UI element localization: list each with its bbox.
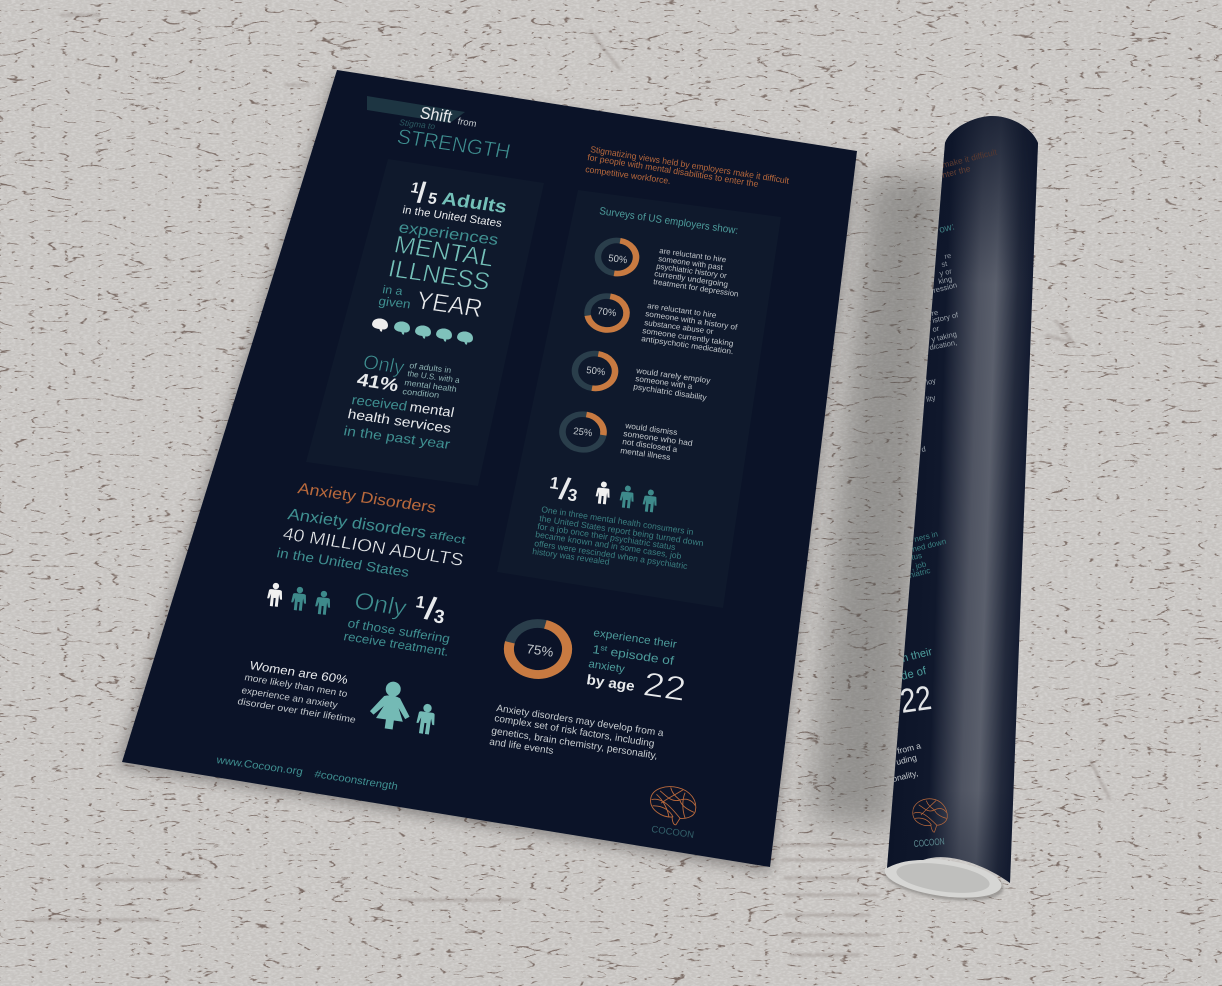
roll visible text: d <box>921 444 926 454</box>
fraction: one fifth: / <box>416 177 427 210</box>
label: 50 percent: 50% <box>608 253 628 266</box>
roll visible text: uding <box>895 752 918 767</box>
panel: one in five adults <box>306 159 544 486</box>
donut: 75 percent <box>502 617 574 681</box>
text: one in three consumers: became known and in some cases, job <box>535 529 682 561</box>
fraction: one fifth: 1 <box>409 179 421 197</box>
roll visible text: or <box>932 324 940 334</box>
fraction: one third <box>548 471 579 507</box>
roll visible text: lity <box>925 393 937 404</box>
text: substance abuse <box>641 301 739 356</box>
text: first episode by age 22 <box>586 627 688 709</box>
heading: adults: Adults <box>440 188 509 217</box>
icon: cocoon brain logo <box>647 784 699 828</box>
label: 75 percent: 75% <box>526 641 555 660</box>
text: mental illness statement: ILLNESS <box>386 255 492 296</box>
text: mental illness statement: in a <box>381 284 404 298</box>
text: only one third receive treatment: of those suffering <box>346 616 452 646</box>
icons: five brains <box>371 317 474 346</box>
roll visible text <box>891 147 998 784</box>
roll visible text: 22 <box>898 679 934 721</box>
roll visible text: dication, <box>929 338 958 352</box>
text: only 41 percent: condition <box>402 387 440 400</box>
donut: 25 percent dismiss <box>559 411 607 453</box>
heading: surveys: Surveys of US employers show: <box>599 205 739 237</box>
donut: 70 percent substance abuse <box>585 293 629 333</box>
text: past history: treatment for depression <box>653 277 739 299</box>
text: only 41 percent: mental health <box>404 378 458 394</box>
text: dismiss: mental illness <box>620 446 671 462</box>
text: dismiss <box>620 421 693 462</box>
text: one in three consumers: for a job once their psychiatric status <box>537 521 676 552</box>
text: first episode by age 22: episode of <box>606 644 675 668</box>
text: past history: someone with past <box>658 254 724 272</box>
roll visible text: ression <box>932 280 958 295</box>
text: one in three consumers <box>532 504 705 571</box>
text: rarely employ: would rarely employ <box>635 366 711 385</box>
text: only one third receive treatment: / <box>422 590 439 627</box>
poster sheet <box>122 70 857 867</box>
roll visible text: from a <box>896 740 922 756</box>
title <box>395 103 513 164</box>
text: past history: psychiatric history or <box>656 262 728 280</box>
text: rarely employ: psychiatric disability <box>633 382 707 402</box>
text: substance abuse: are reluctant to hire <box>647 301 717 320</box>
text: stigmatizing views intro: Stigmatizing views held by employers make it difficult <box>590 144 790 186</box>
text: women are 60 percent <box>237 658 357 725</box>
text: only one third receive treatment: Only <box>352 588 409 622</box>
roll visible text: ners in <box>913 529 939 544</box>
label: 50 percent: 50% <box>586 365 606 378</box>
poster cast shadow <box>118 76 855 872</box>
text: 40 million adults <box>275 506 467 580</box>
text: only 41 percent: in the past year <box>342 423 452 452</box>
fraction: one third: 1 <box>548 473 561 493</box>
title: from <box>456 116 478 130</box>
text: dismiss: not disclosed a <box>622 437 678 454</box>
text: 40 million adults: Anxiety disorders <box>286 506 428 542</box>
roll visible text: ned down <box>911 537 947 554</box>
roll opening <box>882 852 1006 907</box>
roll visible text: ow: <box>938 221 956 236</box>
text: only 41 percent: 41% <box>355 369 401 395</box>
text: stigmatizing views intro: competitive workforce. <box>585 164 671 186</box>
text: substance abuse: substance abuse or <box>644 318 714 336</box>
heading: anxiety disorders: Anxiety Disorders <box>296 480 438 517</box>
text: mental illness statement: given <box>377 294 412 311</box>
text: risk factors: complex set of risk factors, including <box>494 713 655 750</box>
text: only 41 percent <box>342 351 461 452</box>
text: mental illness statement: YEAR <box>414 286 485 323</box>
text: only 41 percent: Only <box>361 351 406 379</box>
text: only one third receive treatment: receive treatment. <box>342 629 450 659</box>
text: only 41 percent: mental <box>408 399 456 420</box>
text: risk factors: Anxiety disorders may develop from a <box>496 703 665 739</box>
icons: three people <box>595 481 658 513</box>
text: substance abuse: someone with a history of <box>645 309 739 332</box>
roll visible text: istory of <box>931 310 960 325</box>
roll cast shadow <box>810 170 950 830</box>
text: risk factors: and life events <box>489 737 554 757</box>
roll visible text: re <box>944 251 952 261</box>
label: 25 percent: 25% <box>573 426 593 439</box>
text: first episode by age 22: 22 <box>641 665 688 709</box>
icons: three people anxiety <box>266 582 332 615</box>
roll visible text: st <box>941 259 949 269</box>
fraction: one third: 3 <box>566 485 579 505</box>
roll visible text: onality, <box>891 768 919 784</box>
text: substance abuse: antipsychotic medication. <box>641 334 734 356</box>
icon: woman and man <box>368 679 437 735</box>
text: substance abuse: someone currently taking <box>642 326 734 348</box>
roll visible text: loy <box>925 376 937 387</box>
text: rarely employ <box>633 366 711 402</box>
text: only one third receive treatment <box>342 588 452 659</box>
title: Stigma to <box>399 117 436 131</box>
text: 40 million adults: affect <box>428 529 467 547</box>
text: one in three consumers: offers were rescinded when a psychiatric <box>534 538 689 571</box>
label: 70 percent: 70% <box>597 306 617 319</box>
text: only one third receive treatment: 1 <box>414 592 427 612</box>
logo wordmark: COCOON <box>651 824 695 841</box>
donut: 50 percent rarely employ <box>572 351 618 391</box>
text: first episode by age 22: st <box>600 643 609 653</box>
roll visible text: make it difficult <box>941 147 998 170</box>
text: one in three consumers: history was revealed <box>532 546 610 567</box>
text: risk factors <box>489 703 665 762</box>
text: only 41 percent: received <box>350 392 408 414</box>
text: mental illness statement <box>377 204 503 323</box>
text: first episode by age 22: anxiety <box>588 658 626 676</box>
roll shading <box>887 116 1038 883</box>
roll visible text: de of <box>900 665 928 683</box>
icon: roll brain logo <box>913 799 947 832</box>
donut: 50 percent reluctant past history <box>595 238 639 276</box>
panel: employer surveys <box>497 190 781 608</box>
roll visible text: nter the <box>941 163 972 180</box>
text: one in three consumers: One in three mental health consumers in <box>541 504 694 537</box>
title banner shape <box>367 96 465 123</box>
text: mental illness statement: experiences <box>397 219 500 249</box>
roll visible text: re <box>931 308 939 318</box>
roll visible text: y taking <box>930 329 958 344</box>
text: women are 60 percent: experience an anxiety <box>241 685 339 710</box>
title: STRENGTH <box>395 125 513 164</box>
roll visible text: n their <box>901 646 934 665</box>
footer links: www.Cocoon.org <box>214 754 304 778</box>
title: Shift <box>418 103 454 127</box>
text: past history <box>653 246 739 299</box>
text: rarely employ: someone with a <box>635 374 693 391</box>
roll visible text: hiatric <box>908 566 931 580</box>
fraction: one third: / <box>556 471 574 507</box>
text: dismiss: would dismiss <box>624 421 678 437</box>
fraction: one fifth <box>409 177 439 210</box>
text: only 41 percent: the U.S. with a <box>407 369 461 385</box>
text: past history: currently undergoing <box>654 269 729 289</box>
text: first episode by age 22: experience their <box>593 627 678 651</box>
text: first episode by age 22: by age <box>586 671 636 694</box>
text: only 41 percent: health services <box>346 406 453 436</box>
roll visible text: y or <box>939 266 953 278</box>
text: women are 60 percent: Women are 60% <box>248 658 350 687</box>
roll visible text: tus <box>911 551 923 562</box>
footer links <box>214 754 399 793</box>
footer links: #cocoonstrength <box>313 768 399 793</box>
rolled poster <box>882 116 1038 907</box>
roll visible text: king <box>938 274 953 286</box>
text: only one third receive treatment: 3 <box>432 606 446 629</box>
text: stigmatizing views intro: for people with mental disabilities to enter the <box>587 152 759 189</box>
text: one in three consumers: the United States report being turned down <box>539 513 705 548</box>
text: mental illness statement: in the United States <box>401 204 503 230</box>
text: first episode by age 22: 1 <box>592 642 600 657</box>
roll visible text: , job <box>910 559 928 572</box>
fraction: one fifth: 5 <box>426 190 439 208</box>
text: 40 million adults: in the United States <box>275 545 411 580</box>
text: 40 million adults: 40 MILLION ADULTS <box>281 523 465 570</box>
text: only 41 percent: of adults in <box>409 361 452 375</box>
text: risk factors: genetics, brain chemistry, personality, <box>491 726 658 762</box>
text: women are 60 percent: more likely than men to <box>244 672 348 699</box>
text: past history: are reluctant to hire <box>659 246 727 264</box>
roll body <box>887 116 1038 883</box>
text: women are 60 percent: disorder over their lifetime <box>237 696 357 725</box>
text: mental illness statement: MENTAL <box>392 231 496 272</box>
text: dismiss: someone who had <box>623 429 693 448</box>
roll logo wordmark: COCOON <box>913 836 945 850</box>
